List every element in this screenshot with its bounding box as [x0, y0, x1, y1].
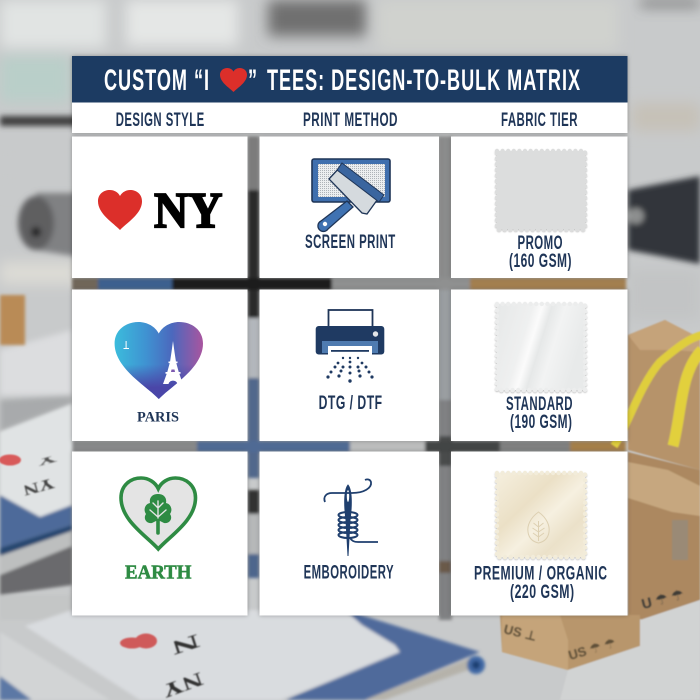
cell: row 3 fabric: [451, 452, 628, 616]
title text: [104, 64, 581, 97]
title text: ”: [248, 64, 258, 97]
title text: CUSTOM “I: [104, 64, 210, 97]
design: heart NY logo: NY: [154, 184, 222, 240]
label: premium organic: PREMIUM / ORGANIC: [474, 563, 608, 585]
icon: screen print frame and squeegee: [312, 159, 390, 231]
label: standard: (190 GSM): [510, 411, 572, 433]
column headers: DESIGN STYLE: [116, 109, 205, 131]
icon: DTG printer: [316, 310, 384, 383]
label: screen print: SCREEN PRINT: [305, 231, 396, 253]
label: Earth: EARTH: [125, 562, 192, 584]
label: premium organic: [474, 563, 608, 603]
icon: needle and thread: [324, 479, 378, 556]
swatch: premium organic fabric: [497, 473, 585, 557]
cell: row 2 print: [260, 290, 439, 441]
label: promo: (160 GSM): [509, 250, 572, 272]
matrix table panels: [72, 56, 628, 616]
cell: row 1 design: [72, 136, 248, 278]
label: standard: [506, 393, 573, 433]
column header strip: [72, 102, 628, 133]
icon: Eiffel tower: [163, 341, 183, 384]
icon: title heart: [220, 68, 247, 92]
ink spray dots: [326, 357, 374, 383]
label: Paris: PARIS: [137, 410, 179, 426]
background prop: package marks: U ☂ ☂: [640, 586, 685, 612]
prop: heart and NY print on left shirt: Y: [36, 453, 58, 468]
design: Earth embroidered patch: [121, 478, 196, 549]
background prop: package marks: US ☂ ☂: [567, 635, 618, 663]
column headers: PRINT METHOD: [303, 109, 398, 131]
design: Paris heart: [115, 322, 203, 399]
background prop: package marks: US ⊥: [502, 621, 538, 644]
label: DTG / DTF: DTG / DTF: [319, 392, 383, 414]
column headers: [116, 109, 578, 131]
prop: heart and NY print on left shirt: YN: [21, 474, 56, 499]
cell: row 1 fabric: [451, 136, 628, 278]
label: premium organic: (220 GSM): [510, 581, 575, 603]
label: promo: PROMO: [518, 232, 563, 254]
cell: row 2 fabric: [451, 290, 628, 441]
swatch: promo fabric: [497, 151, 585, 229]
cell: row 3 design: [72, 452, 248, 616]
label: embroidery: EMBOROIDERY: [304, 562, 394, 584]
background prop: package marks: [504, 590, 683, 660]
design: heart NY logo: [98, 184, 222, 240]
label: standard: STANDARD: [506, 393, 573, 415]
title bar: [72, 56, 628, 102]
icon: tree: [145, 494, 171, 533]
prop: heart and NY print on bottom shirt: [120, 630, 206, 700]
column headers: FABRIC TIER: [501, 109, 578, 131]
icon: embossed leaf: [528, 512, 549, 543]
cell: row 1 print: [260, 136, 439, 278]
prop: heart and NY print on left shirt: [0, 453, 58, 499]
cell: row 3 print: [260, 452, 439, 616]
prop: heart and NY print on bottom shirt: N: [169, 630, 202, 659]
label: promo: [509, 232, 572, 272]
cell: row 2 design: [72, 290, 248, 441]
swatch: standard fabric: [497, 304, 585, 390]
